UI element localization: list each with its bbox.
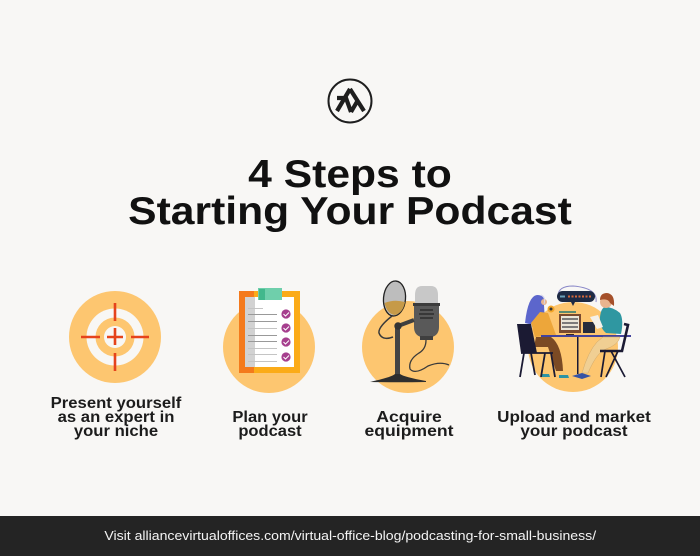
label: step 1: Present yourself	[50, 395, 181, 412]
label: step 3	[364, 409, 454, 440]
label: step 1: your niche	[73, 423, 158, 440]
title	[128, 153, 572, 233]
title: Starting Your Podcast	[128, 190, 572, 233]
label: step 3: equipment	[364, 423, 453, 440]
label: step 1	[50, 395, 182, 440]
label: step 4: Upload and market	[497, 409, 651, 426]
label: step 2: podcast	[238, 423, 301, 440]
label: step 2: Plan your	[232, 409, 307, 426]
label: step 3: Acquire	[376, 409, 441, 426]
label: step 4	[497, 409, 651, 440]
title: 4 Steps to	[248, 153, 452, 196]
footer bar	[0, 516, 700, 556]
label: step 1: as an expert in	[57, 409, 174, 426]
footer bar: Visit alliancevirtualoffices.com/virtual-office-blog/podcasting-for-small-business/	[104, 528, 596, 543]
label: step 2	[232, 409, 308, 440]
label: step 4: your podcast	[520, 423, 628, 440]
